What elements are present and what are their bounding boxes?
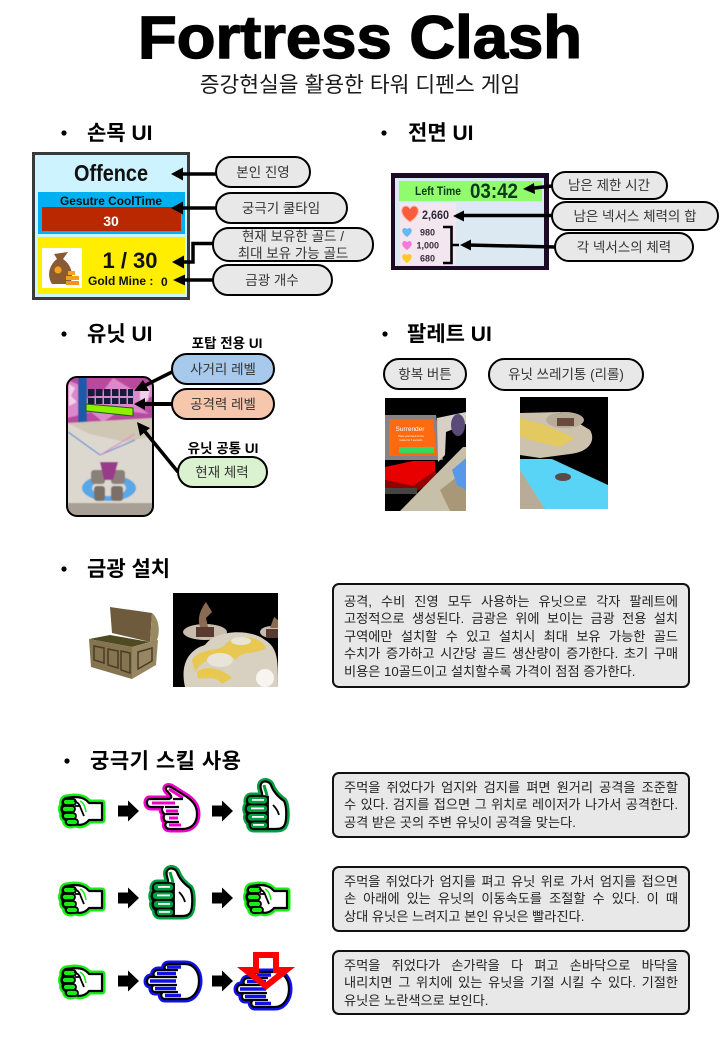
cooltime bar [38, 192, 185, 234]
callout: attack level [172, 389, 274, 419]
image: surrender button: button for 5 seconds [400, 439, 423, 442]
arrow: cooltime [171, 202, 216, 214]
text block: gold mine description: 고정적으로 생성된다. 금광은 위에 보이는 금광 전용 설치 [344, 611, 678, 626]
text block: gesture 2 description: 상대 유닛은 느려지고 본인 유닛은 빨라진다. [344, 909, 584, 924]
text block: gesture 3 description: 유닛은 노란색으로 보인다. [344, 993, 488, 1008]
image: gold mine [173, 593, 284, 687]
text block: gesture 1 description: 수 있다. 검지를 접으면 그 위치로 레이저가 나가서 공격한다. [344, 797, 678, 812]
callout: gold: 현재 보유한 골드 / [242, 229, 344, 244]
text block: gesture 1 description [332, 772, 690, 838]
arrow: attack [134, 398, 172, 410]
panel: front UI screen [391, 173, 549, 270]
panel: wrist UI screen [34, 154, 188, 298]
callout: time: 남은 제한 시간 [568, 178, 650, 193]
callout: range level [172, 354, 274, 384]
callout: mine count: 금광 개수 [245, 273, 299, 288]
callout: gold [213, 228, 373, 261]
callout: each hp [555, 233, 693, 261]
text block: gold mine description: 비용은 10골드이고 설치할수록 가격이 점점 증가한다. [344, 664, 635, 679]
icon: pointing hand [147, 786, 197, 829]
arrow: total [453, 210, 552, 222]
arrow: team [171, 168, 216, 180]
icon: open hand [147, 964, 199, 999]
text block: gold mine description: 공격, 수비 진영 모두 사용하는 유닛으로 각자 팔레트에 [344, 594, 678, 609]
heading: gold mine install: 금광 설치 [87, 558, 170, 581]
callout: each hp: 각 넥서스의 체력 [577, 240, 671, 255]
image: surrender button: Place your hand on the [398, 435, 424, 438]
gesture row 2 [62, 868, 287, 916]
text block: gold mine description [332, 583, 690, 688]
image: treasure chest [89, 607, 159, 679]
label: tower only: 포탑 전용 UI [192, 336, 262, 351]
callout: current hp [178, 457, 267, 487]
text block: gold mine description: 수치가 증가하고 시간당 골드 생산량이 증가한다. 초기 구매 [344, 646, 678, 661]
text block: gesture 2 description: 주먹을 쥐었다가 엄지를 펴고 유닛 위로 가서 엄지를 접으면 [344, 874, 678, 889]
icon: fist [246, 885, 287, 913]
image: surrender button: Surrender [396, 426, 425, 433]
icon: slap hand with red arrow [237, 955, 295, 1007]
total heart: 2,660 [422, 208, 449, 222]
gesture row 3 [62, 955, 295, 1007]
icon: thumbs up [246, 781, 286, 829]
heading: front UI: 전면 UI [408, 122, 473, 145]
callout: gold: 최대 보유 가능 골드 [238, 246, 348, 261]
callout: cooltime: 궁극기 쿨타임 [242, 201, 320, 216]
icon: fist [62, 885, 102, 913]
heading: wrist UI: 손목 UI [87, 122, 152, 145]
text block: gesture 3 description: 내리치면 그 위치에 있는 유닛을 기절 시킬 수 있다. 기절한 [344, 975, 678, 990]
arrow [118, 970, 139, 992]
arrow: gold [172, 244, 213, 268]
callout: range level: 사거리 레벨 [190, 362, 256, 377]
text block: gold mine description: 구역에만 설치할 수 있고 설치시 최대 보유 가능한 골드 [344, 629, 678, 644]
callout: reroll: 유닛 쓰레기통 (리롤) [508, 367, 624, 382]
text block: gesture 1 description: 공격 받은 곳의 주변 유닛이 공격을 맞는다. [344, 815, 576, 830]
arrow [212, 888, 233, 908]
icon: fist [62, 797, 102, 825]
text block: gesture 3 description: 주먹을 쥐었다가 손가락을 다 펴고 손바닥으로 바닥을 [344, 958, 678, 973]
callout: cooltime [216, 193, 347, 223]
team label: Offence [74, 160, 148, 186]
arrow [118, 888, 139, 908]
label: unit common: 유닛 공통 UI [188, 441, 258, 456]
callout: current hp: 현재 체력 [195, 465, 249, 480]
arrow [118, 800, 139, 822]
text block: gesture 3 description [332, 950, 690, 1015]
arrow: range [134, 372, 172, 391]
callout: total hp: 남은 넥서스 체력의 합 [573, 209, 697, 224]
text block: gesture 2 description [332, 866, 690, 932]
callout: total hp [552, 202, 718, 230]
timer: Left Time [415, 186, 461, 198]
gold panel: 1 / 30 [102, 248, 158, 273]
callout: team [216, 157, 310, 187]
callout: attack level: 공격력 레벨 [190, 397, 256, 412]
heading: palette UI: 팔레트 UI [407, 323, 492, 346]
nexus hearts [402, 228, 439, 264]
heading: unit UI: 유닛 UI [87, 323, 152, 346]
timer: 03:42 [470, 180, 518, 203]
heading: ultimate skill use: 궁극기 스킬 사용 [90, 750, 241, 773]
timer [415, 180, 518, 203]
icon: thumbs up [152, 868, 192, 916]
callout: time [552, 172, 667, 199]
gold panel: 0 [161, 275, 168, 289]
nexus hearts: 1,000 [416, 240, 439, 250]
text block: gesture 1 description: 주먹을 쥐었다가 엄지와 검지를 펴면 원거리 공격을 조준할 [344, 780, 678, 795]
callout: reroll [489, 359, 643, 390]
arrow: each nexus [460, 240, 555, 250]
text block: gesture 2 description: 손 아래에 있는 유닛의 이동속도를 조절할 수 있다. 이 때 [344, 891, 678, 906]
nexus hearts: 980 [420, 228, 435, 238]
arrow: current hp [137, 422, 178, 472]
callout: team: 본인 진영 [236, 165, 290, 180]
arrow: time [523, 183, 552, 194]
gold panel: Gold Mine : [88, 274, 153, 288]
image: reroll bin [520, 397, 608, 509]
callout: surrender [384, 359, 466, 389]
subtitle: 증강현실을 활용한 타워 디펜스 게임 [200, 73, 520, 97]
title: Fortress Clash [138, 4, 582, 71]
gesture row 1 [62, 781, 286, 829]
cooltime bar: 30 [103, 213, 119, 229]
image: surrender button [385, 398, 466, 511]
nexus hearts: 680 [420, 254, 435, 264]
arrow: mine [173, 274, 213, 286]
bracket [443, 227, 459, 263]
cooltime bar: Gesutre CoolTime [60, 196, 162, 208]
callout: surrender: 항복 버튼 [398, 367, 452, 382]
arrow [212, 970, 233, 992]
gold panel [38, 237, 185, 294]
icon: fist [62, 968, 102, 996]
callout: mine count [213, 265, 332, 295]
arrow [212, 800, 233, 822]
total heart [402, 206, 449, 222]
panel: unit screenshot [67, 377, 153, 517]
